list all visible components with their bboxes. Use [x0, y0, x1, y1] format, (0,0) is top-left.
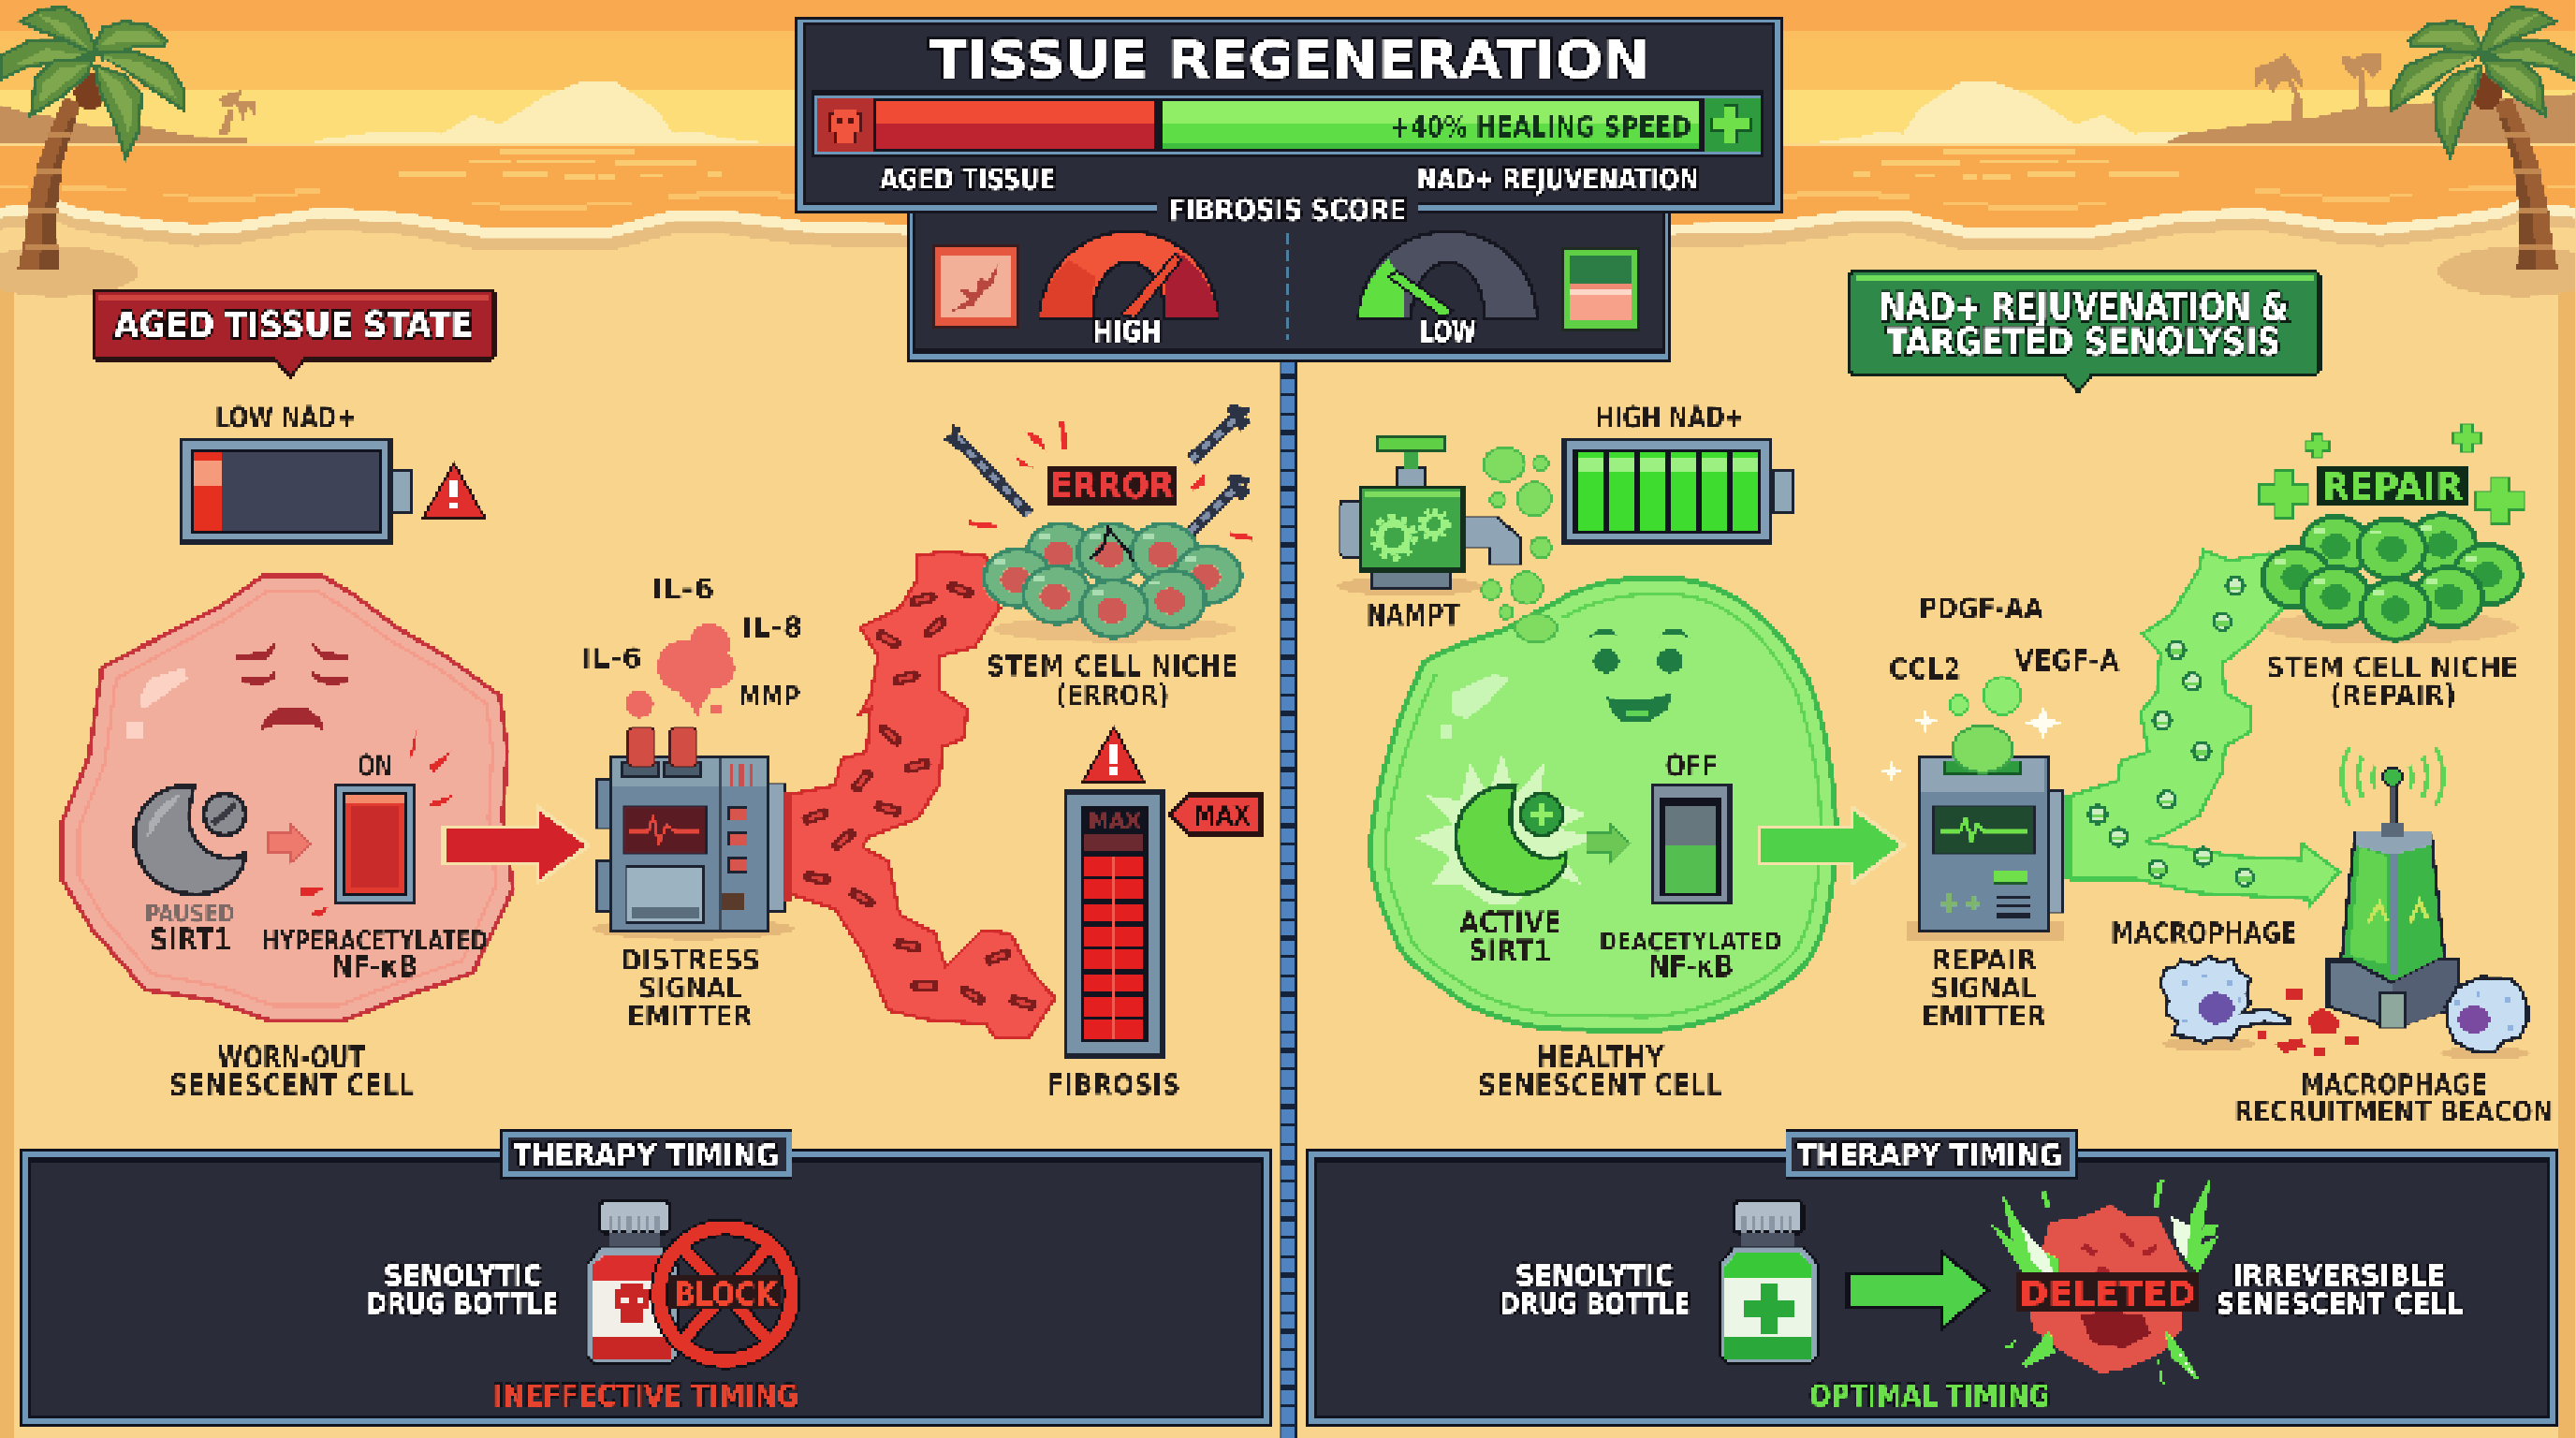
arrow: green to emitter [1759, 808, 1904, 883]
label: worn-out senescent cell [169, 1039, 415, 1103]
label: repair signal emitter: SIGNAL [1931, 973, 2037, 1005]
tab: therapy timing: THERAPY TIMING [513, 1137, 779, 1173]
gauge: high fibrosis [1040, 231, 1218, 318]
label: healthy senescent cell: SENESCENT CELL [1478, 1067, 1722, 1103]
label: worn-out senescent cell: WORN-OUT [217, 1039, 365, 1075]
title: TISSUE REGENERATION [929, 30, 1649, 90]
label: deacetylated NF-kB [1600, 926, 1781, 984]
label: deacetylated NF-kB: DEACETYLATED [1600, 926, 1781, 957]
label: senolytic drug bottle: DRUG BOTTLE [367, 1288, 559, 1321]
happy face [1587, 628, 1690, 723]
label: distress signal emitter: DISTRESS [621, 945, 760, 977]
labels: cytokines [580, 573, 803, 712]
label: HIGH: HIGH [1092, 315, 1162, 349]
macrophage recruitment beacon [2328, 747, 2458, 1028]
banner: aged tissue state: AGED TISSUE STATE [114, 304, 473, 345]
label: active SIRT1: ACTIVE [1459, 906, 1561, 940]
label: distress signal emitter [621, 945, 760, 1034]
label: hyperacetylated: HYPERACETYLATED [262, 925, 488, 957]
growth-factor bubbles and sparkles [1881, 677, 2061, 782]
icon: NAMPT pump [1337, 437, 1520, 596]
label: healthy senescent cell: HEALTHY [1536, 1039, 1665, 1075]
sparks [300, 728, 455, 917]
gauge: low fibrosis [1359, 231, 1537, 318]
label: macrophage recruitment beacon [2234, 1069, 2554, 1129]
macrophage left [2160, 957, 2289, 1043]
glow rays [1415, 754, 1596, 903]
icon: skull [817, 98, 873, 153]
labels: growth factors [1889, 593, 2120, 686]
tag: MAX: MAX [1193, 800, 1251, 831]
arrow: SIRT1 to NF-kB [1587, 824, 1630, 863]
signal waves [2342, 747, 2443, 805]
red fibrotic signal stream [788, 551, 1055, 1038]
banner: NAD+ rejuvenation and targeted senolysis: TARGETED SENOLYSIS [1886, 321, 2280, 364]
label: NAD+ rejuvenation: NAD+ REJUVENATION [1417, 164, 1699, 197]
label: stem cell niche (repair): STEM CELL NICHE [2266, 652, 2518, 684]
arrow: bottle to cell [1848, 1252, 1988, 1329]
icon: block symbol [659, 1227, 792, 1360]
repair signal emitter [1906, 726, 2071, 941]
icon: red drug bottle [587, 1201, 678, 1364]
label: macrophage recruitment beacon: MACROPHAGE [2301, 1069, 2487, 1102]
dome [1945, 726, 2020, 774]
label: OFF: OFF [1665, 748, 1718, 784]
tab: therapy timing [501, 1128, 793, 1181]
arrow: red to emitter [444, 807, 589, 883]
label: stem cell niche (error): (ERROR) [1056, 680, 1169, 712]
macrophage right [2446, 977, 2527, 1052]
sparks around error [970, 421, 1252, 541]
icon: right palm tree [2392, 7, 2576, 269]
fibrosis meter: MAX [1089, 810, 1141, 832]
labels: cytokines: IL-8 [741, 611, 803, 643]
stem cell niche (repair) [2260, 512, 2524, 644]
icon: block symbol: BLOCK [674, 1276, 778, 1313]
banner: aged tissue state [94, 290, 494, 376]
label: repair signal emitter: EMITTER [1922, 1001, 2046, 1034]
worn-out senescent cell [62, 576, 513, 1020]
label: irreversible senescent cell: SENESCENT CELL [2217, 1288, 2463, 1321]
label: ineffective timing: INEFFECTIVE TIMING [493, 1378, 798, 1414]
icon: left palm tree [0, 7, 184, 269]
fibrosis score heading: FIBROSIS SCORE [1168, 194, 1407, 227]
labels: cytokines: MMP [739, 681, 800, 712]
title panel [794, 17, 1783, 213]
label: stem cell niche (repair) [2266, 652, 2518, 712]
label: deacetylated NF-kB: NF-κB [1648, 950, 1734, 984]
icon: fibrosis warning triangle [1082, 727, 1145, 783]
icon: paused SIRT1 [135, 786, 245, 894]
label: irreversible senescent cell: IRREVERSIBLE [2232, 1260, 2445, 1293]
icon: off switch [1650, 784, 1732, 905]
icon: healthy tissue tile [1560, 246, 1641, 330]
arrow: SIRT1 to NF-kB [269, 824, 311, 863]
label: high NAD+: HIGH NAD+ [1595, 400, 1744, 435]
center dotted divider [1281, 356, 1295, 1438]
label: aged tissue: AGED TISSUE [880, 164, 1056, 197]
icon: healing crosses [2260, 424, 2525, 524]
error badge: ERROR [1050, 465, 1174, 506]
left island with small palm [0, 91, 256, 143]
label: optimal timing: OPTIMAL TIMING [1809, 1378, 2050, 1414]
labels: growth factors: PDGF-AA [1919, 593, 2044, 625]
tab: therapy timing: THERAPY TIMING [1797, 1137, 2062, 1173]
label: senolytic drug bottle: DRUG BOTTLE [1500, 1288, 1690, 1321]
label: senolytic drug bottle [1500, 1260, 1690, 1321]
cell highlight [127, 668, 187, 738]
icon: plus [1704, 98, 1760, 153]
NAD+ bubbles [1482, 448, 1557, 642]
fibrosis meter [1063, 790, 1164, 1058]
macrophages and debris [2160, 957, 2530, 1060]
label: repair signal emitter: REPAIR [1931, 945, 2037, 977]
labels: growth factors: CCL2 [1889, 653, 1961, 686]
repair badge: REPAIR [2322, 466, 2463, 507]
label: SIRT1: SIRT1 [150, 921, 231, 958]
distress signal emitter [592, 727, 794, 940]
green repair signal stream [2071, 550, 2339, 905]
heartbeat screen [1934, 806, 2034, 854]
label: macrophage: MACROPHAGE [2111, 917, 2297, 950]
green sparks [1989, 1177, 2218, 1384]
label: distress signal emitter: EMITTER [627, 1001, 753, 1034]
aged tissue bar [877, 101, 1155, 148]
label: distress signal emitter: SIGNAL [638, 973, 741, 1005]
label: active SIRT1: SIRT1 [1469, 934, 1551, 968]
label: low NAD+: LOW NAD+ [215, 400, 356, 435]
icon: scarred tissue tile [933, 245, 1018, 330]
icon: broken chains [946, 408, 1249, 532]
label: stem cell niche (error) [987, 651, 1238, 712]
icon: active SIRT1 [1456, 786, 1566, 894]
label: NF-kB: NF-κB [331, 950, 418, 984]
banner: NAD+ rejuvenation and targeted senolysis [1850, 271, 2320, 391]
label: worn-out senescent cell: SENESCENT CELL [169, 1067, 415, 1103]
label: stem cell niche (repair): (REPAIR) [2330, 680, 2456, 712]
stem cell niche (error) [982, 521, 1243, 642]
label: NAMPT: NAMPT [1367, 597, 1459, 633]
panel: therapy timing (ineffective) [21, 1128, 1272, 1426]
labels: growth factors: VEGF-A [2014, 645, 2120, 678]
tag: MAX [1170, 795, 1261, 834]
label: irreversible senescent cell [2217, 1260, 2463, 1321]
icon: green drug bottle [1720, 1201, 1818, 1364]
label: senolytic drug bottle: SENOLYTIC [1515, 1260, 1674, 1293]
icon: warning triangle [423, 463, 485, 518]
gears [1373, 510, 1448, 558]
smoke cloud [625, 624, 735, 718]
healing speed bar [812, 91, 1764, 156]
bar text: +40% HEALING SPEED [1390, 111, 1691, 144]
rejuvenation bar [1164, 101, 1699, 150]
icon: deleted senescent cell [1989, 1177, 2218, 1384]
icon: full battery [1562, 437, 1793, 544]
tab: therapy timing [1785, 1128, 2077, 1181]
icon: low battery [180, 437, 411, 544]
cell highlight [1440, 674, 1509, 739]
right island with small palms [2166, 53, 2576, 143]
sad face [237, 642, 348, 731]
fibrosis score panel [906, 201, 1672, 362]
label: stem cell niche (error): STEM CELL NICHE [987, 651, 1238, 683]
debris [2258, 989, 2358, 1055]
cracks [1089, 529, 1133, 562]
banner: NAD+ rejuvenation and targeted senolysis: NAD+ REJUVENATION & [1880, 286, 2289, 330]
label: senolytic drug bottle [367, 1260, 559, 1321]
label: senolytic drug bottle: SENOLYTIC [384, 1260, 542, 1293]
panel: therapy timing (optimal) [1305, 1128, 2557, 1426]
label: ON: ON [358, 748, 392, 784]
exhaust pipes [622, 727, 701, 777]
label: fibrosis: FIBROSIS [1046, 1069, 1180, 1102]
label: healthy senescent cell [1478, 1039, 1722, 1103]
label: paused: PAUSED [145, 900, 235, 929]
deleted badge: DELETED [2019, 1275, 2196, 1313]
label: active SIRT1 [1459, 906, 1561, 968]
label: repair signal emitter [1922, 945, 2046, 1034]
healthy senescent cell [1370, 578, 1836, 1031]
labels: cytokines: IL-6 [580, 642, 642, 674]
heartbeat screen [623, 806, 707, 854]
icon: on switch [333, 783, 417, 905]
label: LOW: LOW [1420, 315, 1476, 349]
labels: cytokines: IL-6 [652, 573, 714, 605]
